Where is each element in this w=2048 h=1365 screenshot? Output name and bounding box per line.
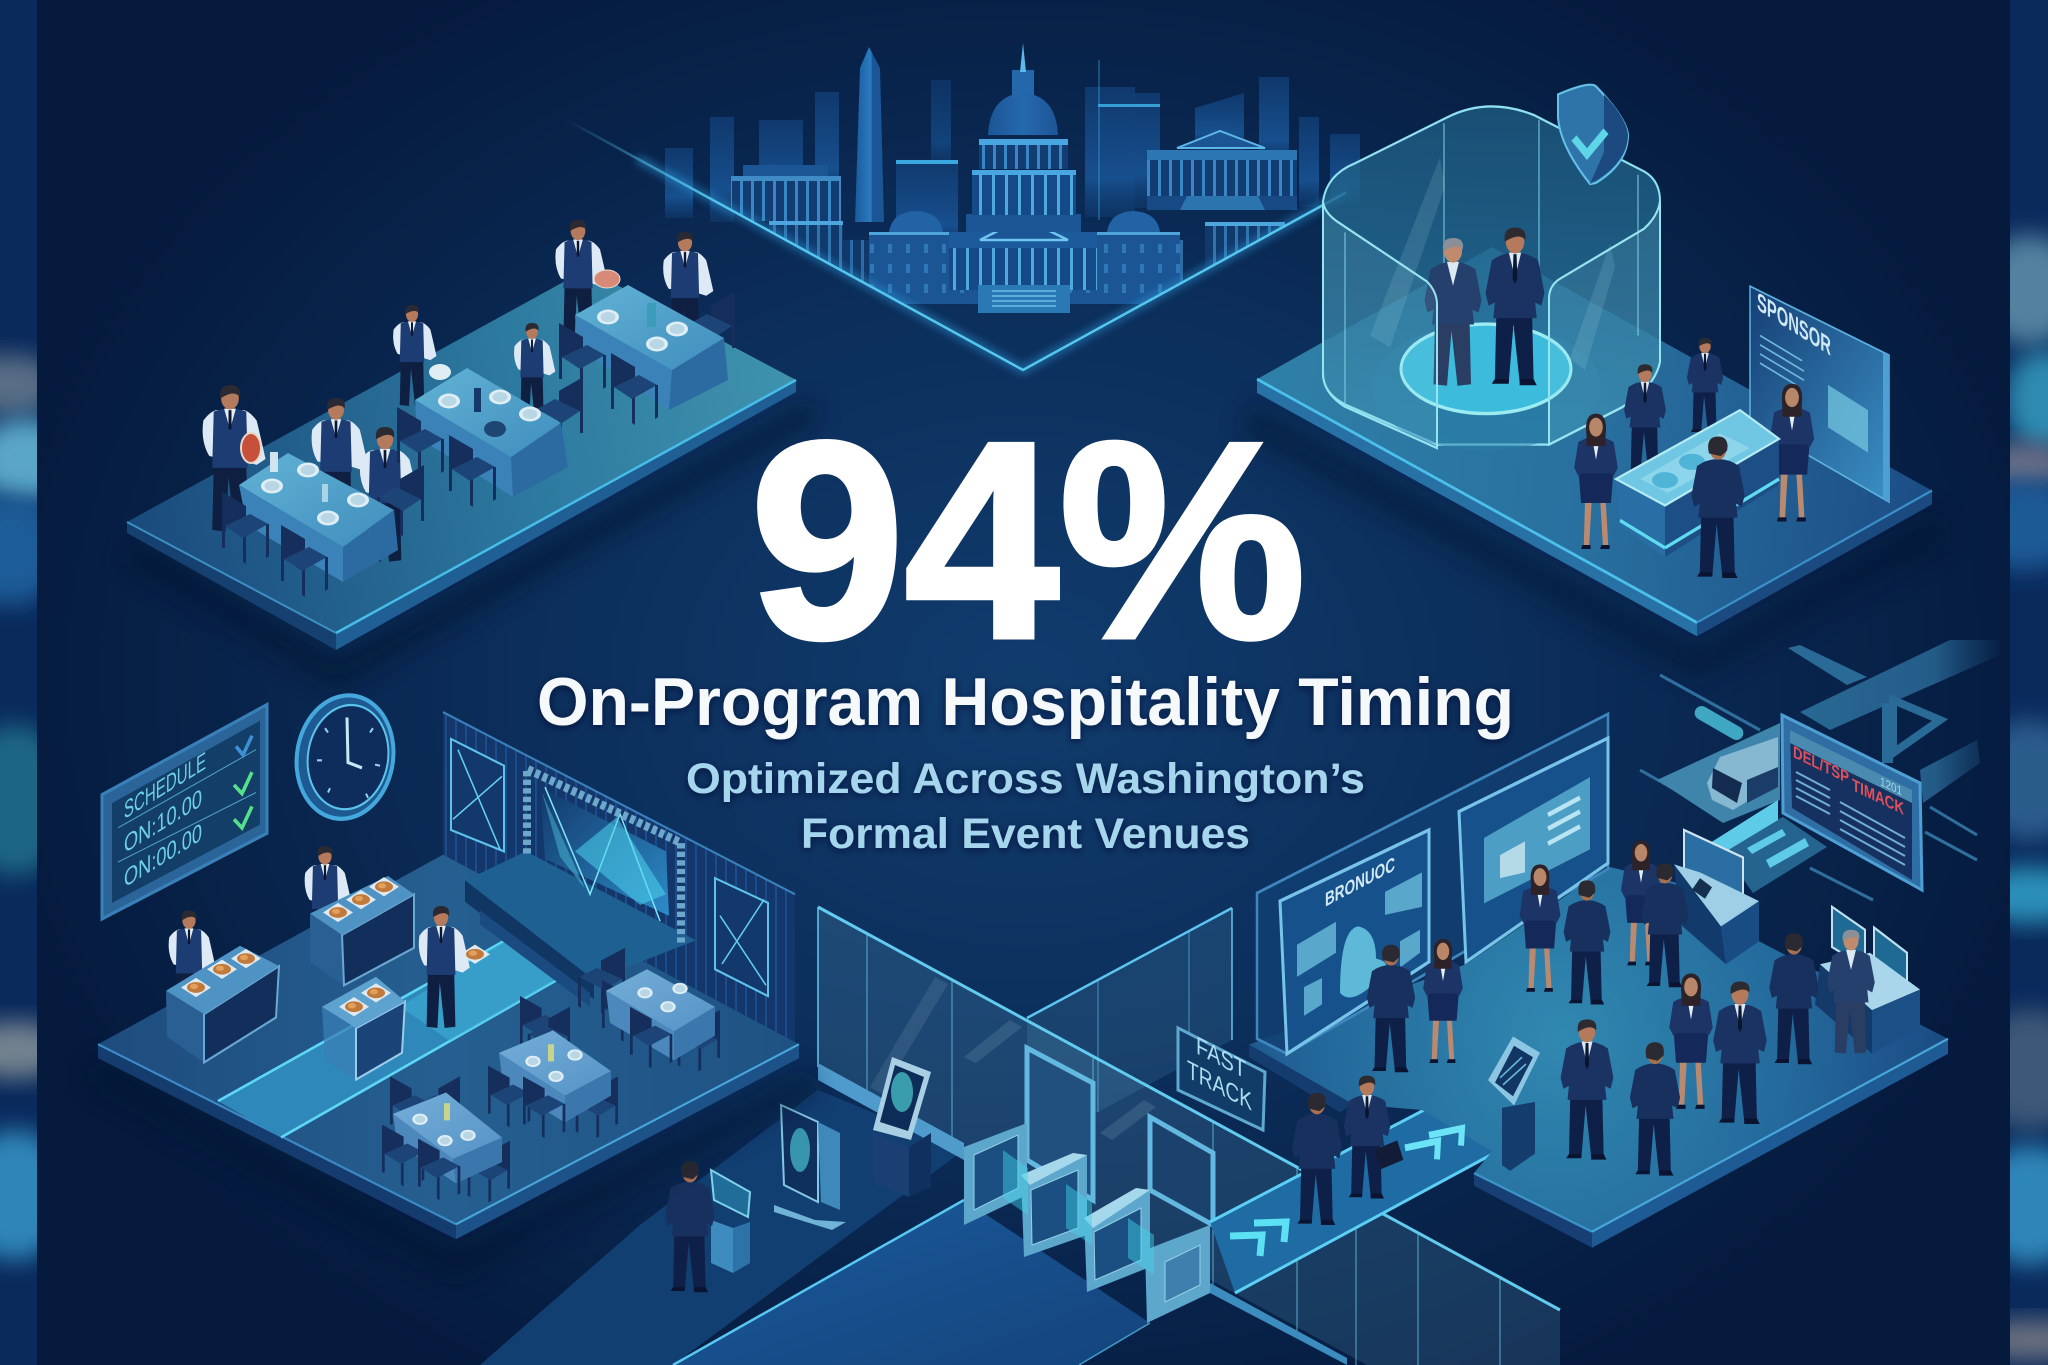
wall panels — [1257, 714, 1608, 1054]
departure board: DEL/TSP — [1793, 742, 1849, 788]
serving items — [241, 270, 620, 463]
kiosk: tall card reader — [873, 1057, 931, 1197]
glass wall front — [818, 907, 1560, 1365]
people in capsule — [1424, 228, 1544, 386]
back wall — [443, 712, 795, 1042]
train platform — [1657, 723, 1780, 823]
floor — [98, 855, 799, 1239]
windows — [451, 739, 768, 996]
washington monument — [855, 47, 884, 222]
cart three — [322, 977, 405, 1080]
departure board: TIMACK — [1852, 775, 1904, 819]
kiosk: touch station — [711, 1170, 750, 1273]
supporting text — [686, 755, 1365, 858]
people at counter back — [1624, 338, 1814, 521]
people — [1292, 840, 1875, 1225]
panel: bottom-right networking floor — [1249, 714, 1948, 1248]
capitol skyline panel — [665, 43, 1360, 313]
panel: bottom-left banquet hall — [90, 686, 815, 1280]
fast track walkway — [1210, 1110, 1500, 1293]
left domed hall — [731, 165, 843, 270]
people at counter front — [1574, 414, 1745, 578]
left edge blurred strip — [0, 0, 37, 1365]
right edge blurred strip — [2010, 0, 2048, 1365]
walkway arrows — [1405, 1128, 1462, 1159]
panel: top-right secure meeting platform — [1240, 85, 1945, 680]
floor bright — [673, 1200, 1150, 1365]
floor dark — [480, 1090, 964, 1365]
cart two — [310, 876, 414, 985]
floor light path — [218, 939, 570, 1137]
schedule board — [102, 705, 267, 919]
skyline silhouettes — [665, 77, 1360, 252]
glass bars — [1345, 120, 1638, 404]
sponsor board: SPONSOR — [1757, 287, 1831, 362]
ticket kiosk — [1488, 1037, 1540, 1171]
glass reflections — [1370, 158, 1615, 370]
kiosk: totem screen — [774, 1105, 846, 1230]
transit beams — [1640, 640, 2000, 900]
panel: top-left banquet platform — [120, 220, 820, 690]
desk two with monitors — [1815, 907, 1920, 1054]
icon: shield — [1558, 85, 1628, 184]
schedule board: SCHEDULE — [124, 747, 206, 825]
line one: Optimized Across Washington’s — [686, 755, 1365, 803]
fast track sign: TRACK — [1187, 1054, 1252, 1117]
door frames — [1027, 1048, 1213, 1225]
front chairs — [222, 323, 658, 597]
interactive counter — [1616, 410, 1779, 557]
walkway arrows — [1230, 1222, 1286, 1256]
line two: Formal Event Venues — [801, 810, 1250, 858]
glowing floor disc — [1371, 324, 1601, 450]
hall tables — [382, 948, 720, 1202]
display one — [1280, 830, 1429, 1054]
departure board — [1782, 715, 1922, 890]
person at station — [665, 1161, 715, 1292]
icon: clock — [286, 686, 404, 829]
light bar — [1692, 703, 1746, 743]
big statistic: 94% — [750, 385, 1306, 697]
fast track sign — [1178, 1028, 1265, 1130]
right columned hall — [1147, 131, 1297, 282]
desk one with monitor — [1674, 830, 1759, 964]
schedule board: ON:00.00 — [124, 818, 202, 894]
glass front panes — [1323, 201, 1660, 448]
schedule board: ON:10.00 — [124, 784, 202, 859]
main block — [843, 211, 1183, 313]
table one — [239, 452, 398, 582]
cart one — [166, 946, 279, 1062]
transit deck — [1710, 800, 1827, 893]
floor glow line — [673, 1200, 1150, 1365]
right glass wall — [1027, 908, 1232, 1150]
rear chairs — [377, 292, 735, 537]
stage — [465, 769, 696, 1007]
subtitle: On-Program Hospitality Timing — [537, 664, 1514, 740]
glass capsule back — [1323, 106, 1660, 445]
train — [1707, 737, 1778, 810]
skyline highlights — [896, 60, 1160, 220]
dome and drum — [966, 43, 1081, 232]
floor — [1249, 867, 1948, 1248]
display two — [1459, 738, 1608, 962]
platform — [127, 269, 796, 650]
table two — [415, 368, 568, 497]
carts and waiters — [166, 846, 490, 1080]
panel: bottom-centre corridor floor — [480, 907, 1560, 1365]
waiters back row — [203, 220, 713, 562]
platform — [1257, 247, 1932, 636]
table three — [575, 285, 728, 410]
panel: transit hub behind networking floor — [1640, 640, 2000, 900]
serving waiter — [419, 906, 470, 1028]
turnstile gates — [964, 1123, 1210, 1323]
departure board: 1201 — [1880, 775, 1902, 798]
sponsor board — [1750, 286, 1889, 502]
display one: BRONUOC — [1325, 853, 1395, 912]
V glow line — [565, 119, 1345, 370]
capitol building — [731, 43, 1297, 313]
fast track sign: FAST — [1196, 1030, 1246, 1085]
